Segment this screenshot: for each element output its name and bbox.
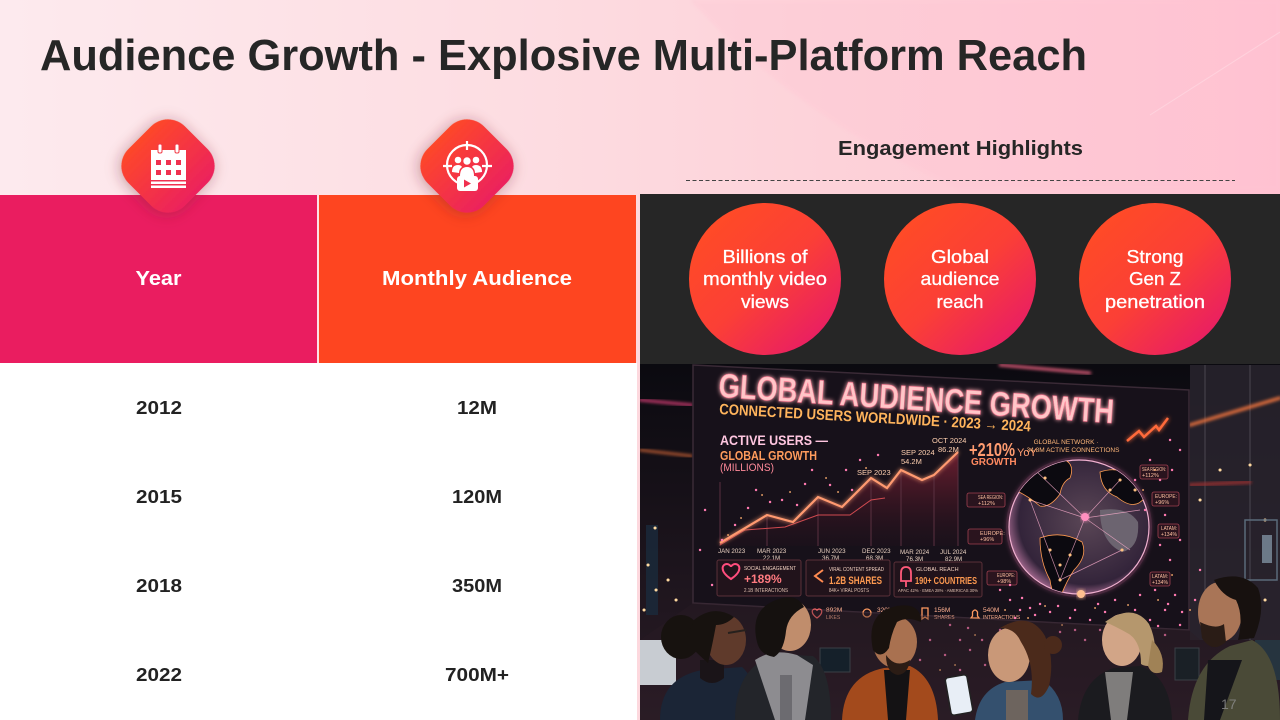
- screen: growth stat: GROWTH: [971, 457, 1017, 468]
- screen: chart axis labels: 82.9M: [945, 556, 962, 563]
- screen: region tags: LATAM:: [1161, 526, 1177, 532]
- screen: region tags: [967, 465, 1179, 586]
- screen: chart heading: ACTIVE USERS —: [720, 432, 828, 448]
- row 2022: [136, 665, 509, 685]
- room windows: [1190, 365, 1280, 640]
- screen: growth stat: +210%: [969, 440, 1015, 460]
- screen: network label: 34.8M ACTIVE CONNECTIONS: [1027, 447, 1120, 454]
- highlight: strong Gen Z penetration: Strong: [1126, 246, 1184, 267]
- screen: chart axis labels: 36.7M: [822, 555, 839, 562]
- screen title: GLOBAL AUDIENCE GROWTH: [717, 367, 1115, 431]
- row 2012: [136, 398, 497, 418]
- highlight: global audience reach: audience: [920, 268, 1000, 289]
- highlight: billions of monthly video views: views: [741, 291, 789, 312]
- screen: chart axis labels: JUN 2023: [818, 548, 846, 555]
- screen: bottom metric strip: SHARES: [934, 615, 955, 621]
- highlight: billions of monthly video views: [689, 203, 841, 355]
- row 2022: 2022: [136, 665, 182, 685]
- lower room and desks: [812, 610, 1166, 672]
- screen: region tags: +112%: [1142, 473, 1159, 479]
- header cell: Year: Year: [136, 268, 182, 290]
- page number: 17: [1221, 696, 1237, 712]
- highlight: global audience reach: Global: [931, 246, 989, 267]
- screen: social engagement card: SOCIAL ENGAGEMENT: [744, 566, 797, 572]
- screen: global reach card: [894, 562, 982, 597]
- screen: chart axis labels: 22.1M: [763, 555, 780, 562]
- highlight: strong Gen Z penetration: [1079, 203, 1231, 355]
- screen: network label: [1026, 440, 1120, 452]
- screen: global reach card: APAC 42% · EMEA 28% · AMERICAS 30%: [898, 588, 978, 593]
- screen: viral content card: 84K+ VIRAL POSTS: [829, 588, 870, 594]
- person 3: [842, 605, 938, 720]
- screen: line chart: 86.2M: [938, 445, 959, 454]
- image: people watching global audience growth screen: [640, 364, 1280, 720]
- screen: chart heading: (MILLIONS): [720, 462, 774, 474]
- screen: chart heading: [720, 432, 828, 474]
- screen: line chart: 54.2M: [901, 457, 922, 466]
- smartphone: [946, 676, 972, 715]
- screen: globe: [1006, 457, 1152, 598]
- screen: region tags: EUROPE:: [997, 573, 1015, 579]
- screen: region tags: SEA REGION:: [1142, 467, 1166, 473]
- row 2018: [136, 576, 502, 596]
- screen: line chart: [720, 436, 966, 546]
- screen title: CONNECTED USERS WORLDWIDE · 2023 → 2024: [719, 401, 1032, 435]
- person 5: [1078, 612, 1172, 720]
- screen: viral content card: VIRAL CONTENT SPREAD: [829, 567, 884, 573]
- screen: region tags: SEA REGION:: [978, 495, 1003, 501]
- title: Audience Growth - Explosive Multi-Platform Reach: [40, 31, 1087, 80]
- highlight: global audience reach: reach: [936, 291, 984, 312]
- screen: social engagement card: [717, 560, 801, 596]
- highlight: global audience reach: [884, 203, 1036, 355]
- screen: region tags: +96%: [980, 537, 994, 543]
- screen: network label: GLOBAL NETWORK ·: [1034, 439, 1098, 446]
- row 2012: 2012: [136, 398, 182, 418]
- highlight: strong Gen Z penetration: penetration: [1105, 291, 1205, 312]
- particles: [700, 440, 1215, 670]
- screen: line chart: SEP 2024: [901, 448, 935, 457]
- screen: chart axis labels: MAR 2023: [757, 548, 787, 555]
- person 2: [735, 597, 831, 720]
- screen: social engagement card: +189%: [744, 572, 782, 586]
- header cell: Monthly Audience: Monthly Audience: [382, 268, 572, 290]
- screen: viral content card: [806, 560, 890, 596]
- screen: region tags: EUROPE:: [980, 531, 1005, 537]
- row 2018: 350M: [452, 576, 502, 596]
- screen: global reach card: 190+ COUNTRIES: [915, 575, 977, 587]
- screen: chart axis labels: JUL 2024: [940, 549, 967, 556]
- city lights: [646, 525, 658, 615]
- row 2022: 700M+: [445, 665, 509, 685]
- table: audience by year: [0, 195, 637, 720]
- row 2015: 2015: [136, 487, 182, 507]
- screen: growth stat: YoY: [1017, 447, 1037, 459]
- screen: chart axis labels: JAN 2023: [718, 548, 746, 555]
- person 4: [945, 621, 1063, 720]
- room neon lights: [640, 365, 1280, 485]
- screen: region tags: +96%: [1155, 500, 1169, 506]
- icon: audience target badge: [410, 109, 524, 223]
- screen: region tags: +134%: [1152, 580, 1168, 586]
- person 1: [660, 611, 748, 720]
- screen: social engagement card: 2.1B INTERACTIONS: [744, 588, 788, 594]
- highlight: billions of monthly video views: monthly video: [703, 268, 827, 289]
- screen: line chart: SEP 2023: [857, 468, 891, 477]
- row 2015: 120M: [452, 487, 502, 507]
- panel: engagement highlights: [640, 194, 1280, 364]
- screen: global reach card: GLOBAL REACH: [916, 567, 959, 573]
- screen: chart axis labels: 68.3M: [866, 555, 883, 562]
- screen: region tags: EUROPE:: [1155, 494, 1177, 500]
- screen: line chart: OCT 2024: [932, 436, 966, 445]
- screen: chart axis labels: [718, 548, 966, 561]
- icon: calendar badge: [111, 109, 225, 223]
- screen: chart axis labels: 76.3M: [906, 556, 923, 563]
- screen: region tags: +134%: [1161, 532, 1177, 538]
- screen: chart axis labels: MAR 2024: [900, 549, 930, 556]
- screen: region tags: +98%: [997, 579, 1011, 585]
- person 6: [1188, 576, 1280, 720]
- screen: bottom metric strip: LIKES: [826, 615, 841, 621]
- screen: chart axis labels: DEC 2023: [862, 548, 891, 555]
- screen: bottom metric strip: [812, 607, 1021, 621]
- header cell: Monthly Audience: [319, 195, 636, 363]
- screen: chart heading: GLOBAL GROWTH: [720, 448, 817, 463]
- screen: bottom metric strip: 540M: [983, 607, 999, 614]
- screen: arrow trend icon: [1127, 418, 1168, 441]
- highlight: strong Gen Z penetration: Gen Z: [1129, 268, 1181, 289]
- row 2018: 2018: [136, 576, 182, 596]
- highlight: billions of monthly video views: Billions of: [722, 246, 808, 267]
- screen: bottom metric strip: INTERACTIONS: [983, 615, 1021, 621]
- header cell: Year: [0, 195, 317, 363]
- screen: region tags: +112%: [978, 501, 995, 507]
- row 2015: [136, 487, 502, 507]
- heading: Engagement Highlights: Engagement Highlights: [838, 138, 1083, 160]
- screen: growth stat: [970, 443, 1036, 465]
- screen: bottom metric strip: 320M: [877, 607, 893, 614]
- row 2012: 12M: [457, 398, 497, 418]
- LED screen: [693, 365, 1189, 630]
- screen: viral content card: 1.2B SHARES: [829, 575, 882, 587]
- screen: bottom metric strip: 892M: [826, 607, 842, 614]
- table body: [0, 363, 637, 720]
- screen: region tags: LATAM:: [1152, 574, 1168, 580]
- screen: bottom metric strip: 156M: [934, 607, 950, 614]
